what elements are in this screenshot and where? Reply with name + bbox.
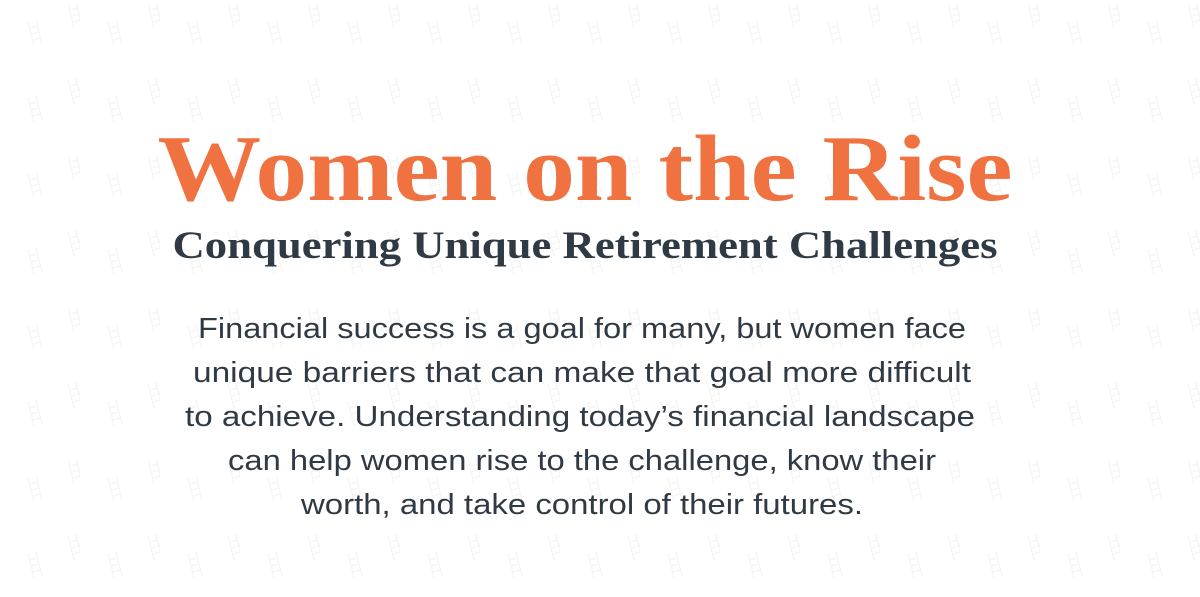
title: Women on the Rise — [158, 117, 1012, 221]
subtitle: Conquering Unique Retirement Challenges — [172, 224, 998, 267]
body text: unique barriers that can make that goal more difficult — [193, 357, 971, 389]
body text: worth, and take control of their futures. — [300, 489, 863, 521]
body text: to achieve. Understanding today’s financial landscape — [185, 401, 975, 433]
body text — [185, 313, 975, 521]
body text: Financial success is a goal for many, but women face — [198, 313, 966, 345]
body text: can help women rise to the challenge, know their — [228, 445, 936, 477]
